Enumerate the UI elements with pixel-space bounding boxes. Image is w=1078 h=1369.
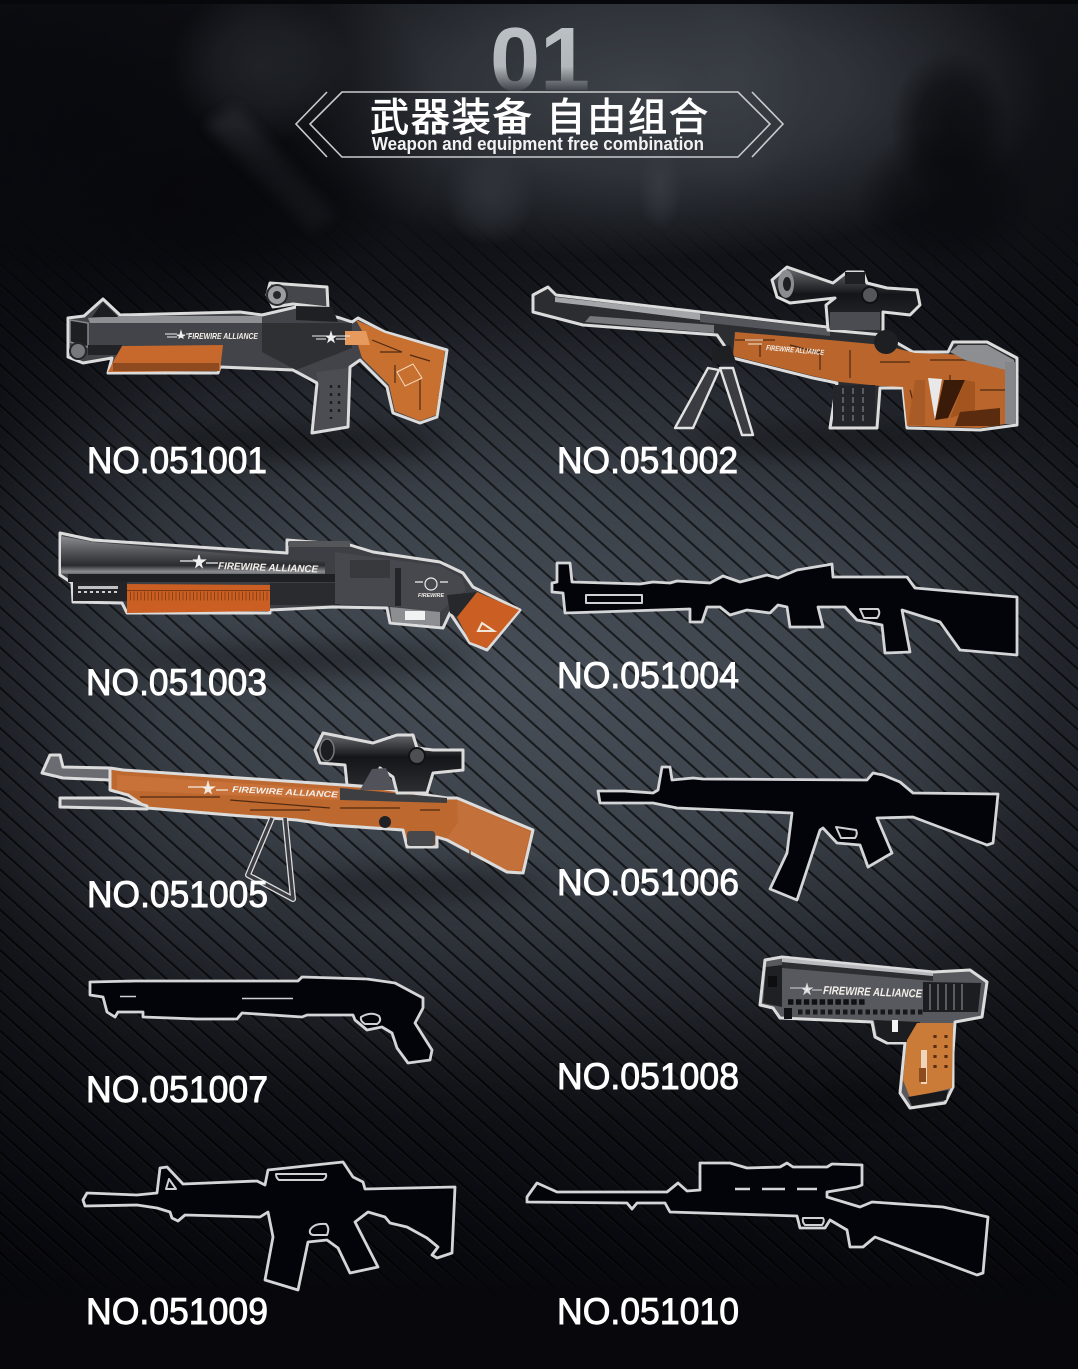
english subheading: Weapon and equipment free combination bbox=[372, 134, 704, 154]
outline bbox=[83, 1162, 455, 1290]
scope mount gaps bbox=[735, 1188, 817, 1190]
action bbox=[340, 788, 447, 803]
stock shadow bricks bbox=[735, 340, 1010, 420]
product label 051002: NO.051002 bbox=[557, 440, 738, 481]
scope bbox=[267, 283, 328, 308]
orange stock bbox=[733, 332, 1005, 428]
slide vents bbox=[923, 982, 981, 1012]
outline bbox=[552, 563, 1017, 655]
trigger guard bbox=[390, 607, 440, 626]
trigger guard bbox=[407, 831, 435, 846]
gun: 051002 sniper rifle bbox=[533, 267, 1017, 435]
trigger guard bbox=[803, 1218, 824, 1225]
receiver label: FIREWIRE bbox=[418, 593, 445, 599]
star emblem bbox=[188, 782, 228, 793]
section number 01: 01 bbox=[490, 10, 590, 110]
chinese heading: 武器装备 自由组合 bbox=[370, 97, 708, 140]
muzzle bbox=[42, 755, 110, 780]
brand print: FIREWIRE ALLIANCE bbox=[188, 331, 258, 341]
stock bricks bbox=[140, 790, 510, 860]
trigger guard bbox=[874, 1020, 920, 1042]
product label 051009: NO.051009 bbox=[86, 1291, 268, 1332]
outline body bbox=[110, 768, 533, 873]
orange forend bbox=[127, 584, 270, 613]
receiver bbox=[335, 552, 466, 612]
gun: 051004 silhouette bbox=[552, 563, 1017, 655]
star emblem bbox=[180, 555, 218, 567]
gun: 051001 shotgun bbox=[68, 283, 447, 433]
product label 051001: NO.051001 bbox=[87, 440, 267, 481]
thumbhole bbox=[928, 378, 942, 420]
top strip bbox=[782, 960, 933, 981]
light slits bbox=[120, 996, 293, 998]
gun: 051005 rifle with scope bbox=[42, 733, 533, 899]
product label 051008: NO.051008 bbox=[557, 1056, 739, 1097]
brand print: FIREWIRE ALLIANCE bbox=[766, 343, 825, 357]
receiver emblem bbox=[312, 332, 350, 342]
product label 051010: NO.051010 bbox=[557, 1291, 739, 1332]
pistol grip bbox=[314, 368, 348, 431]
upper sight rail bbox=[288, 541, 350, 547]
star emblem bbox=[165, 331, 192, 338]
outline bbox=[527, 1163, 988, 1275]
receiver bbox=[262, 323, 352, 370]
star emblem bbox=[790, 984, 822, 994]
lower rail bbox=[68, 574, 358, 582]
outline bbox=[598, 767, 998, 900]
hole rows bbox=[788, 999, 866, 1005]
product label 051007: NO.051007 bbox=[86, 1069, 268, 1110]
trigger guard bbox=[361, 1014, 380, 1024]
trigger guard bbox=[836, 827, 857, 838]
receiver emblem bbox=[415, 578, 448, 590]
trigger guard bbox=[310, 1224, 328, 1235]
barrel band bbox=[88, 345, 122, 355]
top rail bbox=[88, 316, 262, 323]
banner frame with chevrons bbox=[296, 92, 783, 157]
sight bbox=[92, 302, 118, 317]
background photo: soldiers in haze bbox=[0, 0, 1078, 370]
gun: 051003 short shotgun bbox=[60, 533, 520, 650]
gun: 051006 silhouette bbox=[598, 767, 998, 900]
scope bbox=[772, 267, 920, 354]
gun: 051009 silhouette bbox=[83, 1162, 455, 1290]
outline body bbox=[533, 287, 1017, 430]
cleaning rod bbox=[60, 798, 147, 809]
heading banner bbox=[296, 92, 783, 157]
product label 051005: NO.051005 bbox=[87, 874, 268, 915]
bipod bbox=[248, 818, 293, 899]
muzzle block bbox=[70, 320, 88, 347]
product label 051006: NO.051006 bbox=[557, 862, 739, 903]
magazine drum bbox=[70, 343, 86, 359]
magazine base bbox=[908, 1090, 948, 1106]
product label 051004: NO.051004 bbox=[557, 655, 739, 696]
orange stock bbox=[345, 320, 445, 421]
barrel highlights bbox=[555, 297, 700, 320]
upper wood panel bbox=[117, 775, 340, 800]
product label 051003: NO.051003 bbox=[86, 662, 267, 703]
front sight hole bbox=[166, 1179, 176, 1189]
scope bbox=[315, 733, 463, 793]
rear block bbox=[763, 965, 782, 1007]
gun: 051008 pistol bbox=[760, 957, 987, 1108]
magazine bbox=[833, 385, 875, 426]
barrel bbox=[61, 536, 325, 578]
star emblem bbox=[745, 340, 763, 344]
outline bbox=[90, 977, 432, 1063]
stock bbox=[447, 800, 530, 870]
trigger guard bbox=[860, 609, 879, 618]
brand print: FIREWIRE ALLIANCE bbox=[218, 561, 319, 575]
orange forend bbox=[108, 345, 223, 372]
brand print: FIREWIRE ALLIANCE bbox=[232, 784, 339, 800]
stock bbox=[457, 592, 519, 648]
grip bbox=[903, 1023, 953, 1098]
bipod bbox=[675, 345, 753, 435]
slot bbox=[586, 595, 642, 603]
gun: 051010 silhouette bbox=[527, 1163, 988, 1275]
outline body bbox=[68, 299, 447, 433]
gun shadows bbox=[130, 428, 1020, 1108]
carry handle slot bbox=[276, 1174, 326, 1180]
outline bbox=[760, 957, 987, 1108]
cheek rest bbox=[950, 345, 1014, 372]
gun: 051007 silhouette bbox=[90, 977, 432, 1063]
brand print: FIREWIRE ALLIANCE bbox=[823, 985, 923, 1000]
outline body bbox=[60, 533, 520, 650]
